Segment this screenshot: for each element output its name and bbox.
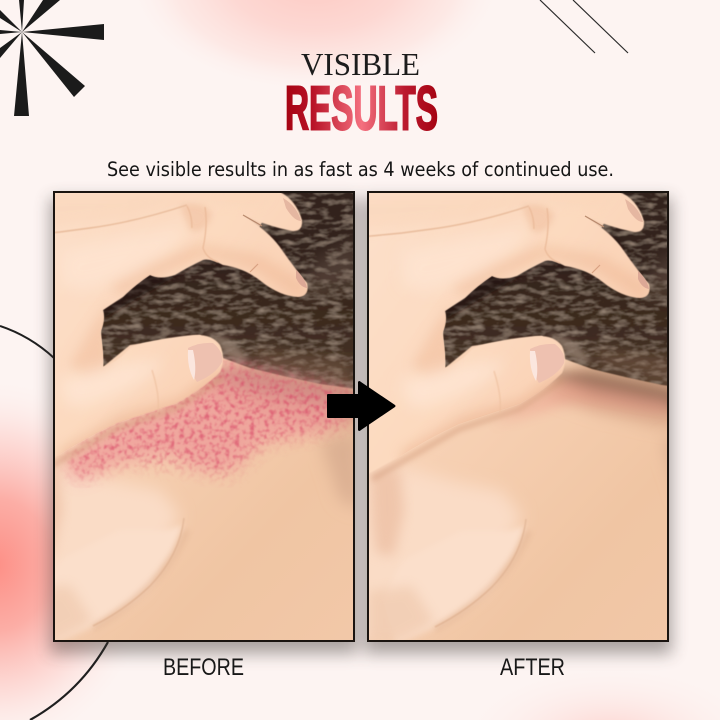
panel shadows [50,198,672,654]
rash blotches [70,362,354,482]
arrow [327,381,396,431]
decorative diagonal lines [540,0,628,53]
left arc lower [30,642,108,720]
icon: starburst [0,0,104,116]
before frame [54,192,354,641]
after frame [368,192,668,641]
subtitle: See visible results in as fast as 4 weeks of continued use. [107,158,614,181]
panel: before photo [55,193,353,640]
left arc upper [0,326,54,358]
label: before: BEFORE [163,654,244,681]
title: RESULTS: RESULTS [285,74,438,144]
label: after: AFTER [500,654,565,681]
title: VISIBLE: VISIBLE [301,46,420,82]
rash base [62,362,354,482]
mild residual redness [509,376,667,420]
panel: after photo [369,193,667,640]
